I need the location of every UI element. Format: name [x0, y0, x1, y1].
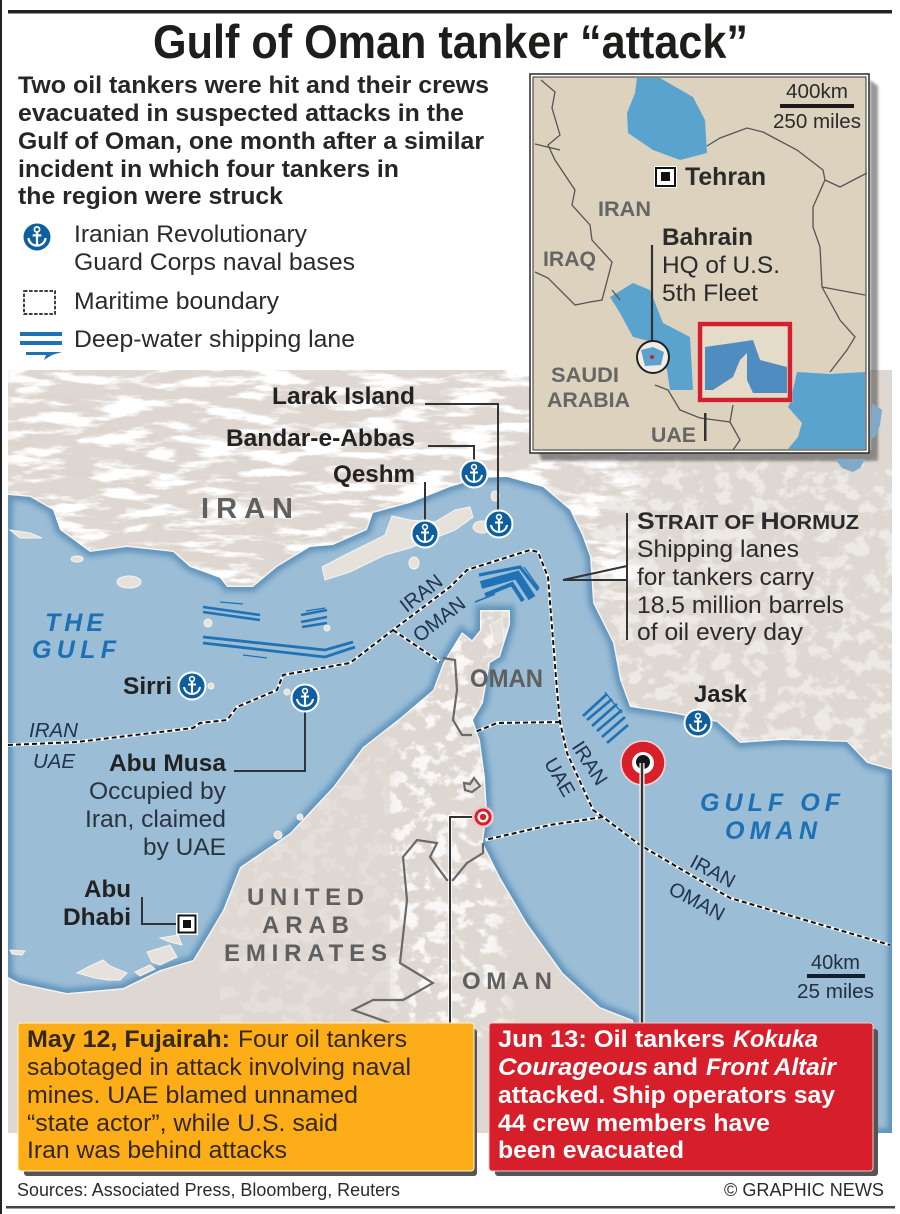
map labels: countries: OMAN	[462, 968, 552, 995]
card: May 12 Fujairah: Four oil tankers	[238, 1026, 407, 1053]
map labels: boundary countries: OMAN	[665, 878, 728, 926]
Strait of Hormuz callout: 18.5 million barrels	[637, 592, 844, 619]
map labels: countries: ARAB	[262, 912, 349, 939]
inset: labels: UAE	[651, 424, 696, 447]
legend	[20, 221, 355, 360]
title: Gulf of Oman tanker “attack”	[153, 15, 748, 68]
inset: scale bar and UAE tick	[704, 104, 854, 441]
Abu Dhabi marker	[176, 913, 198, 935]
intro text: Two oil tankers were hit and their crews	[18, 72, 489, 99]
card: Jun 13 attack: 44 crew members have	[498, 1110, 770, 1137]
map labels: countries: OMAN	[470, 665, 543, 693]
locator inset	[530, 74, 882, 472]
card: May 12 Fujairah: sabotaged in attack involving naval	[27, 1054, 411, 1081]
inset: Bahrain marker	[637, 245, 669, 373]
Strait of Hormuz callout: Shipping lanes	[637, 536, 799, 563]
place labels: Bandar-e-Abbas	[226, 425, 415, 452]
legend: naval base icon	[22, 222, 52, 252]
map labels: boundary countries	[29, 570, 739, 926]
map land base	[8, 370, 892, 1133]
inset: borders	[535, 80, 867, 450]
locator inset: Tehran	[685, 163, 766, 191]
inset: labels	[543, 198, 696, 447]
intro text: incident in which four tankers in	[18, 156, 399, 183]
locator inset: 5th Fleet	[662, 280, 758, 307]
Strait of Hormuz callout	[637, 508, 859, 646]
naval base: Bandar-e-Abbas	[460, 460, 488, 488]
legend: Maritime boundary	[74, 288, 280, 315]
inset: waters	[610, 78, 865, 449]
leader: Fujairah	[450, 817, 483, 1023]
intro text	[18, 72, 489, 210]
card: Jun 13 attack: Jun 13: Oil tankers	[498, 1026, 725, 1053]
legend: Deep-water shipping lane	[74, 326, 355, 353]
map labels: seas: THE	[45, 609, 104, 637]
card: May 12 Fujairah	[18, 1023, 477, 1176]
naval base: Qeshm	[412, 520, 438, 548]
map labels: seas: OMAN	[725, 817, 818, 845]
map labels: countries: EMIRATES	[224, 940, 387, 967]
callout lines	[142, 404, 627, 924]
Strait of Hormuz callout: STRAIT OF HORMUZ	[637, 508, 859, 535]
locator inset: Bahrain	[662, 224, 753, 251]
card: May 12 Fujairah: mines. UAE blamed unnamed	[27, 1082, 358, 1109]
naval base: Jask	[684, 710, 712, 736]
inset: Tehran marker	[654, 166, 677, 188]
marker: Fujairah	[472, 806, 494, 828]
Abu Musa note: Iran, claimed	[85, 806, 226, 833]
Abu Musa note	[85, 778, 227, 861]
place labels: Abu	[84, 876, 131, 903]
map labels: countries	[201, 493, 552, 995]
legend: maritime boundary icon	[24, 291, 55, 314]
inset: labels: SAUDI	[551, 364, 619, 387]
naval base: Abu Musa	[292, 684, 318, 712]
intro text: the region were struck	[18, 183, 283, 210]
islands	[10, 491, 504, 980]
inset: labels: ARABIA	[547, 389, 630, 412]
map labels: boundary countries: UAE	[539, 754, 579, 801]
intro text: Gulf of Oman, one month after a similar	[18, 128, 484, 155]
place labels: Abu Musa	[109, 750, 226, 777]
legend: Guard Corps naval bases	[74, 249, 355, 276]
place labels: Sirri	[123, 673, 172, 700]
locator inset: 400km	[786, 81, 848, 103]
card: Jun 13 attack: Courageous	[498, 1054, 648, 1081]
place labels: Dhabi	[63, 904, 131, 931]
Abu Musa note: by UAE	[143, 834, 226, 861]
inset: red locator box	[698, 322, 792, 402]
Strait of Hormuz callout: for tankers carry	[637, 564, 815, 591]
inset: labels: IRAN	[598, 198, 651, 221]
marker: Jun 13 attack	[621, 741, 665, 786]
legend: Iranian Revolutionary	[74, 221, 308, 248]
main map	[8, 370, 892, 1133]
map labels: boundary countries: IRAN	[396, 570, 447, 617]
map scale: 25 miles	[797, 981, 874, 1003]
inset shadow	[538, 80, 878, 461]
Strait of Hormuz callout: of oil every day	[637, 619, 804, 646]
naval base: Larak Island	[486, 510, 512, 538]
map labels: countries: IRAN	[201, 493, 293, 525]
card: May 12 Fujairah: Iran was behind attacks	[27, 1137, 287, 1164]
card: Jun 13 attack: Kokuka	[733, 1026, 818, 1053]
map labels: seas: GULF	[32, 636, 117, 664]
map scale: 40km	[811, 952, 860, 974]
card: Jun 13 attack: Front Altair	[706, 1054, 837, 1081]
map labels: countries: UNITED	[247, 884, 364, 911]
map labels: seas	[32, 609, 841, 845]
place labels: Larak Island	[272, 383, 415, 410]
sea	[8, 477, 892, 1133]
card: Jun 13 attack	[489, 1023, 878, 1176]
footer sources: Sources: Associated Press, Bloomberg, Reuters	[17, 1179, 400, 1200]
shipping lanes	[203, 567, 628, 743]
footer credit: © GRAPHIC NEWS	[724, 1179, 884, 1200]
map labels: boundary countries: IRAN	[686, 851, 739, 893]
Abu Musa note: Occupied by	[89, 778, 227, 805]
place labels	[63, 383, 747, 931]
naval base: Sirri	[178, 672, 206, 700]
card: May 12 Fujairah: “state actor”, while U.S. said	[27, 1110, 338, 1137]
card: May 12 Fujairah: May 12, Fujairah:	[27, 1026, 230, 1053]
card: Jun 13 attack: been evacuated	[498, 1137, 684, 1164]
locator inset: 250 miles	[773, 111, 861, 133]
ghost sea behind inset	[835, 403, 882, 472]
card: Jun 13 attack: attacked. Ship operators say	[498, 1082, 835, 1109]
locator inset: HQ of U.S.	[662, 252, 780, 279]
map labels: boundary countries: IRAN	[29, 720, 79, 742]
place labels: Qeshm	[333, 461, 415, 488]
map labels: boundary countries: IRAN	[567, 738, 611, 790]
leader: Jun 13 attack	[640, 763, 644, 1023]
land borders	[353, 658, 483, 1023]
map scale	[797, 952, 874, 1003]
map labels: boundary countries: OMAN	[409, 593, 470, 647]
card: Jun 13 attack: and	[653, 1054, 698, 1081]
legend: shipping lane icon	[20, 332, 62, 360]
place labels: Jask	[694, 681, 747, 708]
maritime boundary	[8, 550, 890, 945]
intro text: evacuated in suspected attacks in the	[18, 100, 464, 127]
inset: labels: IRAQ	[543, 248, 596, 271]
map labels: boundary countries: UAE	[33, 751, 76, 773]
map labels: seas: GULF OF	[700, 789, 841, 817]
